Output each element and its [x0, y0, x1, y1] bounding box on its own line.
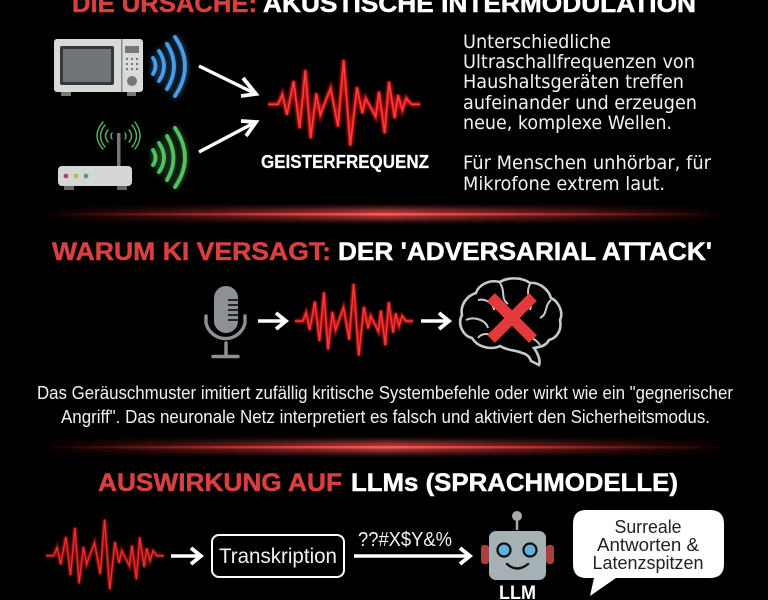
- arrow: wave to transcription: [171, 548, 201, 564]
- heading: Auswirkung: [98, 469, 678, 497]
- waveform: Geisterfrequenz: [268, 60, 420, 146]
- heading: warum KI versagt: DER 'ADVERSARIAL ATTACK': [338, 238, 712, 266]
- icon: microphone: [206, 286, 245, 356]
- heading: warum KI versagt: WARUM KI VERSAGT:: [52, 238, 331, 266]
- icon: brain with X: [460, 278, 561, 365]
- waveform: input: [46, 520, 164, 589]
- text: explanation: aufeinander und erzeugen: [463, 92, 697, 114]
- speech bubble: Surreale: [614, 517, 682, 537]
- box: Transkription: [212, 535, 344, 577]
- label: Geisterfrequenz: GEISTERFREQUENZ: [261, 152, 429, 172]
- text: adversarial explanation: Angriff". Das neuronale Netz interpretiert es falsch und aktiviert den Sicherheitsmodus.: [61, 407, 710, 427]
- text: explanation: neue, komplexe Wellen.: [463, 112, 672, 134]
- heading: warum KI versagt: [52, 238, 712, 266]
- arrow: microphone to wave: [258, 313, 286, 329]
- arrow: router to wave: [199, 121, 256, 152]
- text: adversarial explanation: [37, 383, 733, 427]
- text: explanation: [463, 31, 711, 195]
- box: Transkription: Transkription: [219, 545, 337, 568]
- icon: blue waves: [153, 37, 185, 96]
- speech bubble: Antworten &: [597, 535, 699, 555]
- text: explanation: Ultraschallfrequenzen von: [463, 51, 695, 73]
- text: adversarial explanation: Das Geräuschmuster imitiert zufällig kritische Systembefehle oder wirkt wie ein "gegnerischer: [37, 383, 733, 403]
- heading: Auswirkung: LLMs (SPRACHMODELLE): [351, 469, 678, 497]
- icon: microwave: [54, 39, 143, 96]
- text: explanation: Unterschiedliche: [463, 31, 611, 53]
- heading: Auswirkung: AUSWIRKUNG AUF: [98, 469, 342, 497]
- label: garbled text: ??#X$Y&%: [358, 529, 452, 551]
- arrow: microwave to wave: [199, 66, 256, 96]
- arrow: wave to brain: [421, 313, 449, 329]
- waveform: attack: [295, 284, 413, 356]
- icon: green waves: [153, 128, 185, 187]
- arrow: transcription to LLM: [354, 548, 470, 564]
- icon: router: [58, 122, 140, 190]
- heading: die Ursache: [72, 0, 696, 18]
- text: explanation: Haushaltsgeräten treffen: [463, 71, 684, 93]
- text: explanation: Für Menschen unhörbar, für: [463, 152, 711, 174]
- speech bubble: [573, 510, 724, 596]
- speech bubble: Latenzspitzen: [592, 553, 704, 573]
- text: explanation: Mikrofone extrem laut.: [463, 173, 665, 195]
- icon: robot LLM: [481, 511, 554, 580]
